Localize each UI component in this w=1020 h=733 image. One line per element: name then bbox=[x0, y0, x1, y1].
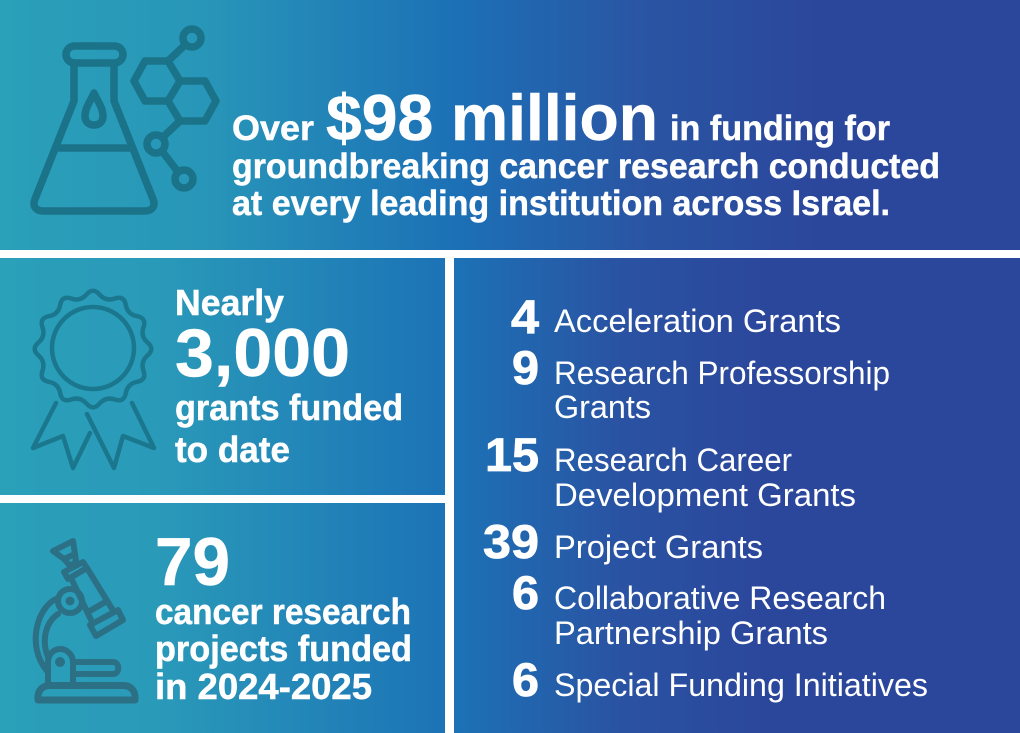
list item: collaborative research partnership grants: Partnership Grants bbox=[554, 615, 828, 651]
list item: special funding initiatives bbox=[512, 653, 928, 706]
list item: acceleration grants bbox=[511, 290, 841, 343]
text: nearly 3,000 grants bbox=[175, 282, 403, 470]
heading: funding total: at every leading institution across Israel. bbox=[232, 184, 890, 223]
list item: research professorship grants bbox=[512, 341, 890, 425]
list item: special funding initiatives: Special Funding Initiatives bbox=[554, 667, 928, 703]
heading: funding total: $98 million bbox=[326, 81, 658, 154]
icon: flask and molecule bbox=[34, 29, 216, 211]
panel: projects funded bbox=[0, 503, 445, 733]
list item: project grants: 39 bbox=[483, 515, 539, 568]
panel: grant types list bbox=[454, 258, 1020, 733]
heading: funding total: groundbreaking cancer research conducted bbox=[232, 147, 940, 186]
list item: research career development grants: Research Career bbox=[554, 442, 792, 478]
list item: acceleration grants: Acceleration Grants bbox=[554, 303, 841, 339]
icon: award ribbon bbox=[33, 291, 154, 468]
text: 79 projects bbox=[155, 524, 412, 707]
list item: acceleration grants: 4 bbox=[511, 290, 539, 343]
text: nearly 3,000 grants: to date bbox=[175, 429, 290, 470]
text: nearly 3,000 grants: 3,000 bbox=[175, 315, 350, 391]
list item: collaborative research partnership grants bbox=[512, 566, 886, 651]
list item: special funding initiatives: 6 bbox=[512, 653, 539, 706]
heading: funding total: Over bbox=[232, 109, 314, 148]
list item: project grants: Project Grants bbox=[554, 529, 763, 565]
panel: top funding banner bbox=[0, 0, 1020, 250]
list item: research career development grants bbox=[485, 428, 856, 513]
text: 79 projects: projects funded bbox=[155, 628, 412, 669]
list item: research professorship grants: Research Professorship bbox=[554, 355, 890, 391]
text: 79 projects: in 2024-2025 bbox=[155, 666, 372, 707]
icon: microscope bbox=[36, 541, 135, 700]
list item: collaborative research partnership grants: 6 bbox=[512, 566, 539, 619]
heading: funding total bbox=[232, 81, 940, 223]
heading: funding total: in funding for bbox=[670, 109, 890, 148]
text: nearly 3,000 grants: grants funded bbox=[175, 387, 403, 428]
panel: grants funded to date bbox=[0, 258, 445, 495]
text: 79 projects: 79 bbox=[155, 524, 230, 600]
list item: research professorship grants: 9 bbox=[512, 341, 539, 394]
text: nearly 3,000 grants: Nearly bbox=[175, 282, 284, 323]
list item: collaborative research partnership grants: Collaborative Research bbox=[554, 580, 886, 616]
text: 79 projects: cancer research bbox=[155, 591, 411, 632]
list item: project grants bbox=[483, 515, 763, 568]
list item: research career development grants: 15 bbox=[485, 428, 539, 481]
list item: research career development grants: Development Grants bbox=[554, 477, 856, 513]
list item: research professorship grants: Grants bbox=[554, 389, 651, 425]
